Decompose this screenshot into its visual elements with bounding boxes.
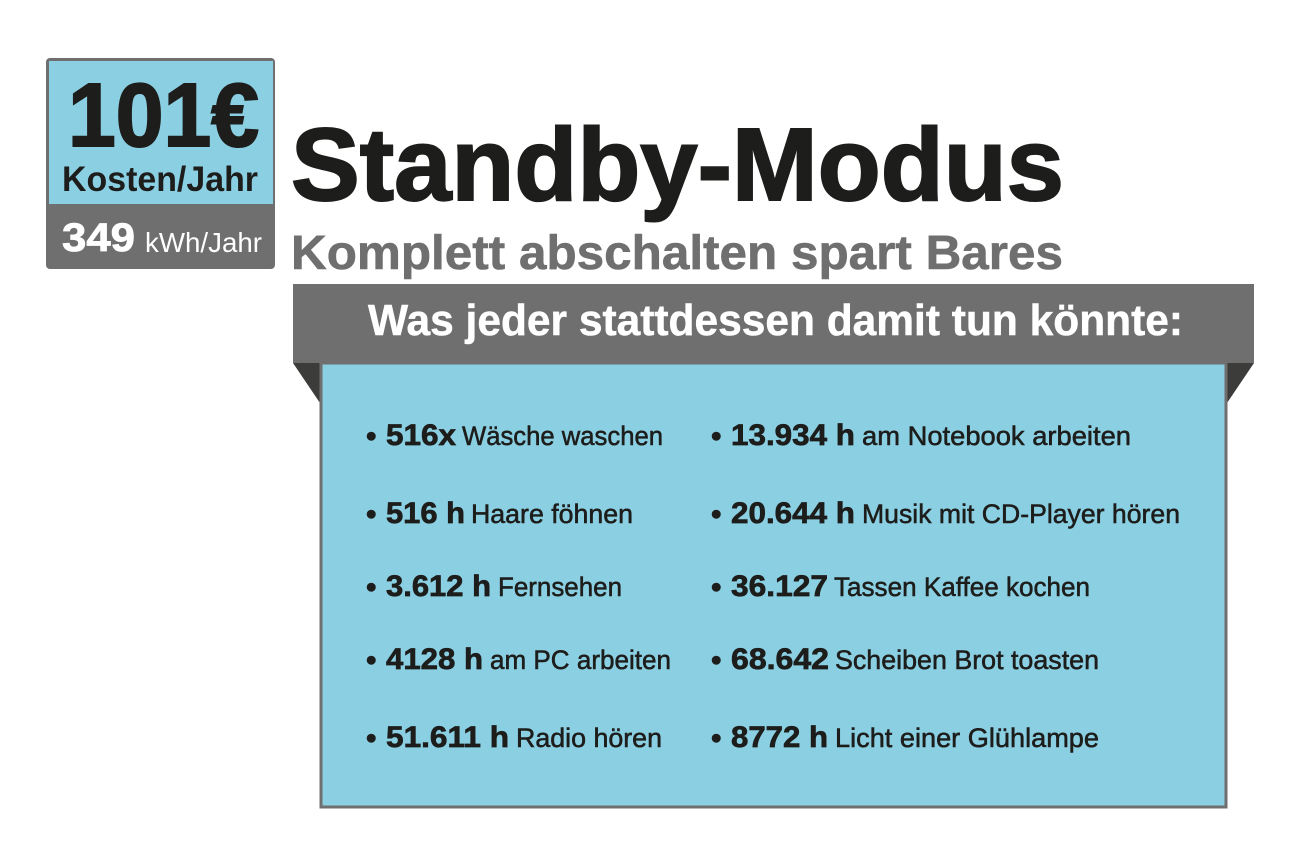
item: hair drying	[366, 497, 633, 531]
item: radio	[366, 721, 662, 755]
item: toast: •	[711, 644, 722, 677]
banner heading: Was jeder stattdessen damit tun könnte:	[368, 296, 1183, 345]
item: toast: Scheiben Brot toasten	[835, 645, 1099, 675]
item: CD player: Musik mit CD-Player hören	[862, 499, 1180, 529]
energy usage: 349	[62, 216, 135, 260]
item: coffee: •	[711, 571, 722, 604]
list: right column	[711, 419, 1180, 755]
item: notebook	[711, 419, 1131, 453]
cost label: Kosten/Jahr	[62, 160, 258, 199]
item: PC work: •	[366, 644, 377, 677]
ribbon banner	[293, 284, 1254, 363]
cost badge	[47, 59, 274, 268]
item: radio: Radio hören	[516, 723, 662, 753]
energy usage: kWh/Jahr	[145, 227, 262, 258]
item: CD player: •	[711, 498, 722, 531]
item: coffee: Tassen Kaffee kochen	[834, 572, 1090, 602]
item: light bulb: Licht einer Glühlampe	[835, 723, 1099, 753]
item: television: 3.612 h	[386, 570, 491, 603]
item: CD player	[711, 497, 1180, 531]
item: notebook: •	[711, 420, 722, 453]
item: light bulb: •	[711, 722, 722, 755]
item: notebook: am Notebook arbeiten	[862, 421, 1131, 451]
item: coffee	[711, 570, 1090, 604]
item: washing: •	[366, 420, 377, 453]
item: washing: 516x	[386, 419, 456, 452]
item: washing: Wäsche waschen	[462, 421, 663, 451]
item: PC work: 4128 h	[386, 643, 483, 676]
item: CD player: 20.644 h	[731, 497, 855, 530]
item: television	[366, 570, 622, 604]
item: washing	[366, 419, 663, 453]
title: Standby-Modus	[291, 107, 1064, 222]
energy usage	[62, 216, 262, 260]
item: notebook: 13.934 h	[731, 419, 855, 452]
item: television: •	[366, 571, 377, 604]
item: light bulb	[711, 721, 1099, 755]
item: radio: •	[366, 722, 377, 755]
item: coffee: 36.127	[731, 570, 828, 603]
item: radio: 51.611 h	[386, 721, 509, 754]
cost amount: 101€	[68, 66, 259, 166]
item: PC work	[366, 643, 671, 677]
panel: activities	[321, 363, 1226, 807]
ribbon folds	[293, 363, 1254, 403]
item: PC work: am PC arbeiten	[490, 645, 671, 675]
subtitle: Komplett abschalten spart Bares	[291, 227, 1063, 280]
item: hair drying: 516 h	[386, 497, 465, 530]
item: light bulb: 8772 h	[731, 721, 828, 754]
list: left column	[366, 419, 671, 755]
item: toast	[711, 643, 1099, 677]
item: hair drying: Haare föhnen	[471, 499, 633, 529]
item: toast: 68.642	[731, 643, 829, 676]
item: television: Fernsehen	[498, 572, 622, 602]
item: hair drying: •	[366, 498, 377, 531]
